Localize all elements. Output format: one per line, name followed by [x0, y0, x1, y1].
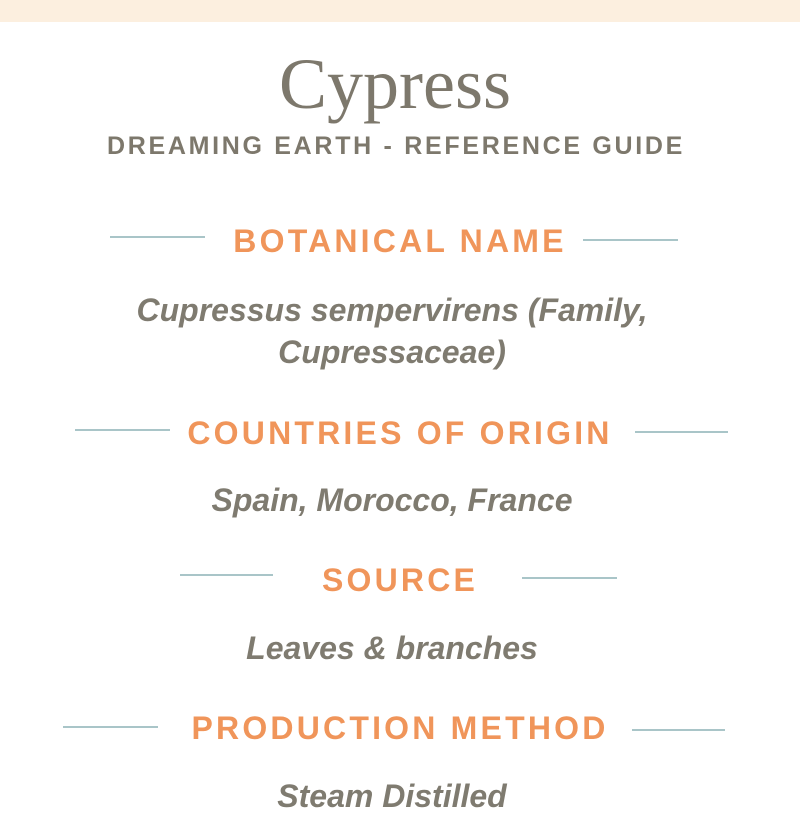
text: botanical name	[136, 292, 648, 370]
top band	[0, 0, 800, 22]
heading: countries of origin: COUNTRIES OF ORIGIN	[187, 415, 613, 451]
text: countries: Spain, Morocco, France	[212, 482, 572, 518]
text: source: Leaves & branches	[246, 630, 538, 666]
text: botanical name: Cupressaceae)	[278, 334, 506, 370]
heading: botanical name: BOTANICAL NAME	[233, 223, 567, 259]
title: Cypress	[279, 44, 511, 124]
heading: source: SOURCE	[322, 562, 478, 598]
text: production method: Steam Distilled	[277, 778, 507, 814]
subtitle: DREAMING EARTH - REFERENCE GUIDE	[107, 132, 685, 160]
heading: production method: PRODUCTION METHOD	[191, 710, 609, 746]
text: botanical name: Cupressus sempervirens (Family,	[136, 292, 648, 328]
